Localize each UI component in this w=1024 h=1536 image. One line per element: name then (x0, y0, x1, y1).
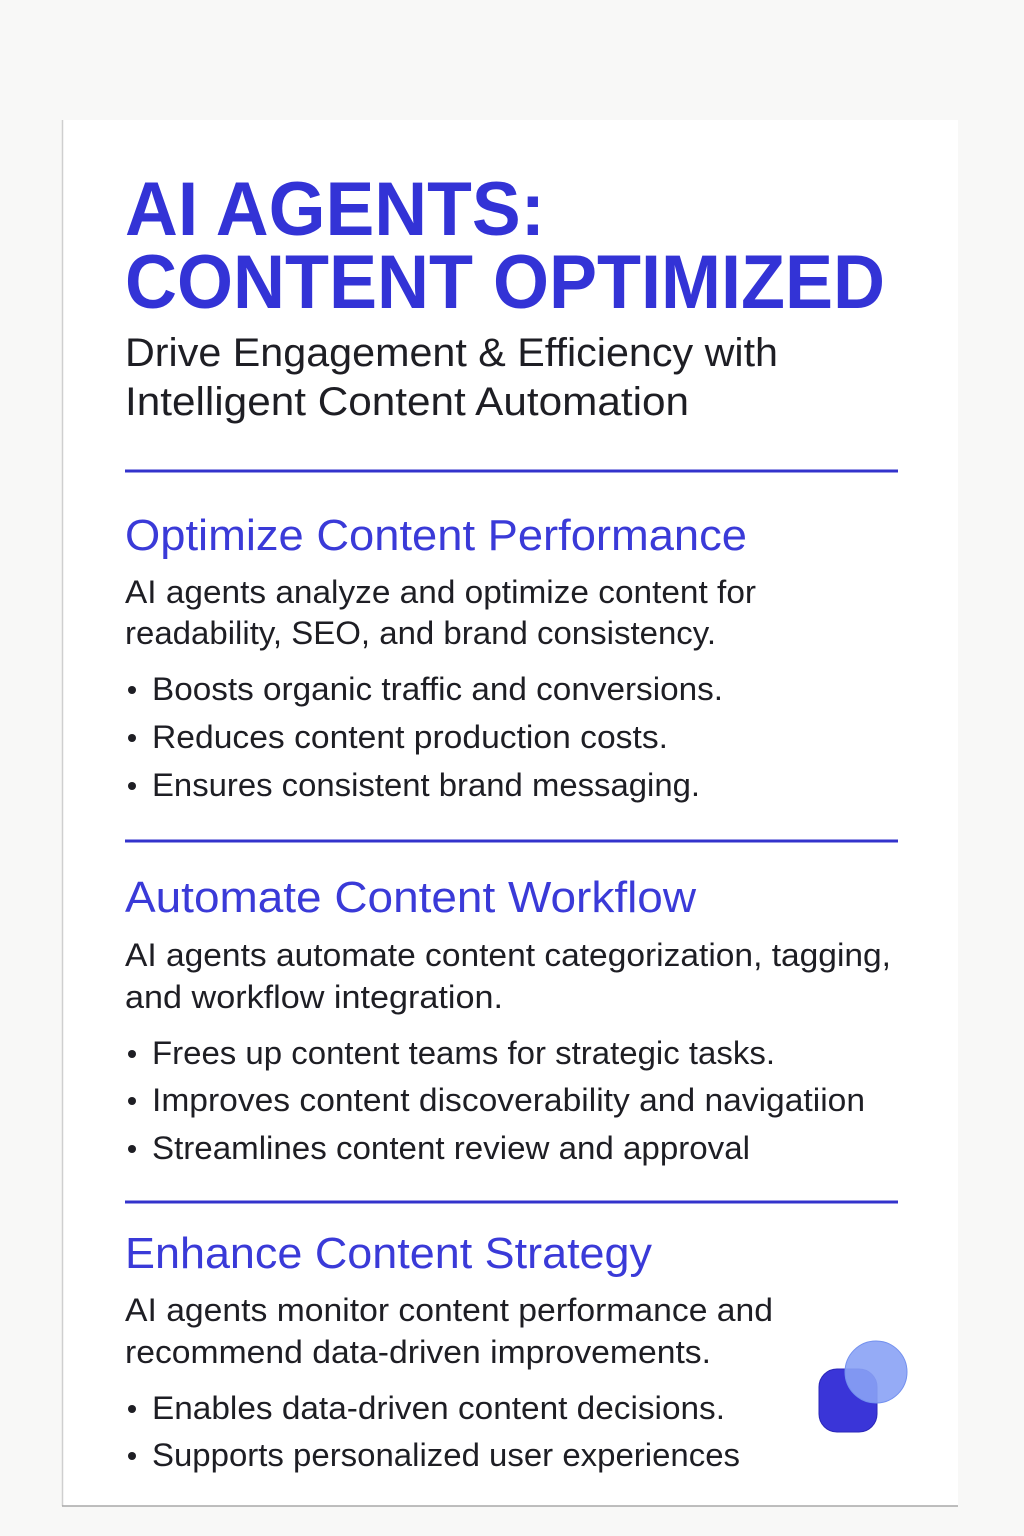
bullets: enhance: Enables data-driven content decisions. (152, 1390, 725, 1426)
title: CONTENT OPTIMIZED (125, 240, 885, 325)
body: automate (125, 937, 891, 1015)
bullets: enhance (128, 1390, 740, 1473)
icon: overlapping shapes (819, 1341, 907, 1432)
subtitle: Intelligent Content Automation (125, 380, 689, 424)
heading: enhance: Enhance Content Strategy (125, 1229, 652, 1278)
title: AI AGENTS: (125, 167, 545, 252)
bullets: automate: Improves content discoverability and navigatiion (152, 1082, 865, 1118)
card (62, 120, 958, 1506)
body: enhance: recommend data-driven improvements. (125, 1334, 711, 1370)
body: automate: AI agents automate content categorization, tagging, (125, 937, 891, 973)
bullets: automate: Frees up content teams for strategic tasks. (152, 1035, 775, 1071)
bullets: optimize (128, 671, 723, 803)
title (125, 167, 885, 325)
bullets: optimize: Boosts organic traffic and conversions. (152, 671, 723, 707)
heading: optimize: Optimize Content Performance (125, 511, 747, 560)
bullets: enhance: Supports personalized user experiences (152, 1437, 740, 1473)
body: automate: and workflow integration. (125, 979, 503, 1015)
section: optimize content performance (125, 511, 756, 803)
section: automate content workflow (125, 873, 891, 1166)
body: optimize (125, 574, 756, 651)
body: optimize: readability, SEO, and brand consistency. (125, 615, 716, 651)
bullets: automate (128, 1035, 865, 1166)
subtitle (125, 331, 778, 424)
body: optimize: AI agents analyze and optimize content for (125, 574, 756, 610)
heading: automate: Automate Content Workflow (125, 873, 696, 922)
body: enhance: AI agents monitor content performance and (125, 1292, 773, 1328)
bullets: automate: Streamlines content review and approval (152, 1130, 750, 1166)
bullets: optimize: Ensures consistent brand messaging. (152, 767, 700, 803)
subtitle: Drive Engagement & Efficiency with (125, 331, 778, 375)
bullets: optimize: Reduces content production costs. (152, 719, 668, 755)
body: enhance (125, 1292, 773, 1370)
section: enhance content strategy (125, 1229, 773, 1473)
